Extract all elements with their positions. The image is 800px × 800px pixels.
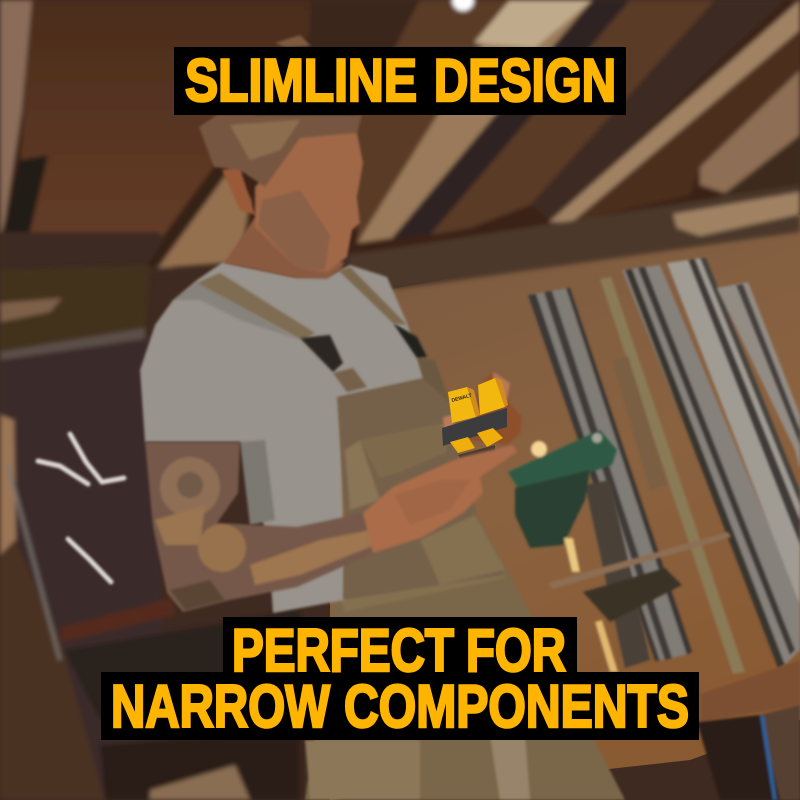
product logo: DEWALT [451,393,473,404]
tool rails [528,258,800,674]
hand behind product [443,372,522,445]
heading: slimline design: DESIGN [434,47,616,114]
wall [330,215,800,800]
front hand [363,445,517,553]
heading line 2 [111,673,689,740]
heading line 2: NARROW [111,673,330,740]
t-shirt [140,262,425,613]
man [140,35,625,800]
overalls bib [197,267,505,600]
banner: slimline design [174,47,626,115]
heading line 1: PERFECT [232,617,454,684]
ceiling and beams [0,0,800,295]
drill press and table [508,430,800,800]
head and neck [199,35,363,279]
trousers [305,520,625,800]
tattooed arm [145,442,375,612]
heading line 1: FOR [466,617,566,684]
white light reflections [38,434,124,582]
product: dewalt clamps [442,378,508,465]
banner: perfect for narrow components [101,617,699,740]
left room glass panel [0,265,300,800]
heading: slimline design: SLIMLINE [185,47,417,114]
heading: slimline design [185,47,616,114]
heading line 2: COMPONENTS [344,673,689,740]
